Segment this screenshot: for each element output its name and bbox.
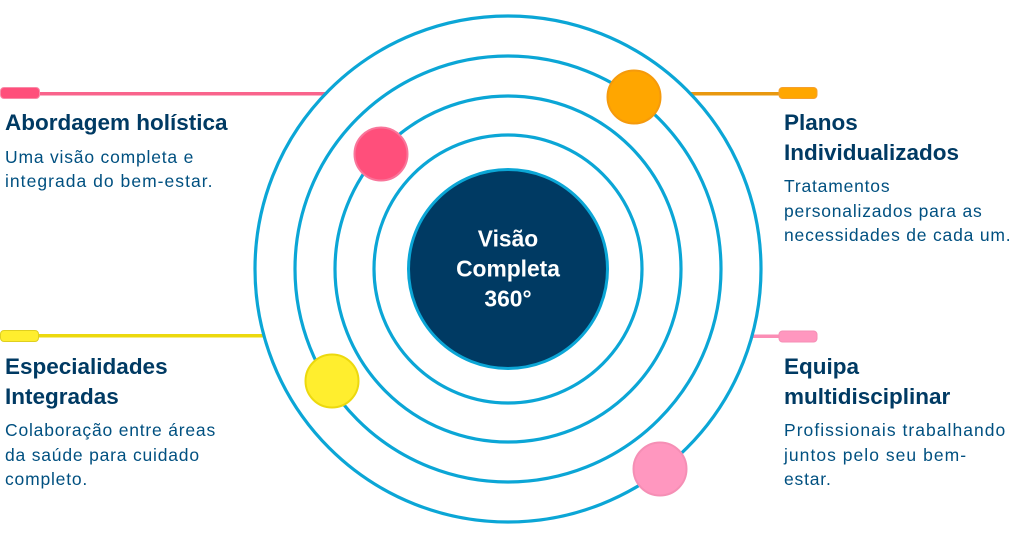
text block: Abordagem holística: Abordagem holística <box>5 110 228 135</box>
text block: Equipa multidisciplinar: Equipa <box>784 354 859 379</box>
center label: Visão <box>478 226 538 252</box>
text block: Equipa multidisciplinar: Profissionais trabalhando <box>784 420 1006 440</box>
text block: Abordagem holística <box>5 110 228 191</box>
text block: Planos Individualizados <box>784 110 1011 245</box>
text block: Especialidades Integradas: Colaboração entre áreas <box>5 420 216 440</box>
text block: Especialidades Integradas: completo. <box>5 469 88 489</box>
text block: Equipa multidisciplinar: juntos pelo seu bem- <box>784 444 967 464</box>
text block: Especialidades Integradas <box>5 354 216 489</box>
text block: Especialidades Integradas: da saúde para cuidado <box>5 444 200 464</box>
rings <box>255 16 761 522</box>
text block: Planos Individualizados: personalizados para as <box>784 200 983 220</box>
text block: Especialidades Integradas: Especialidades <box>5 354 168 379</box>
text block: Equipa multidisciplinar: multidisciplinar <box>784 384 950 408</box>
text block: Planos Individualizados: Planos <box>784 110 858 135</box>
text block: Abordagem holística: integrada do bem-estar. <box>5 171 214 191</box>
node: orange <box>608 70 660 124</box>
connector: yellow line <box>0 330 264 342</box>
connector: pink line <box>0 88 326 98</box>
text block: Equipa multidisciplinar <box>784 354 1006 489</box>
node: yellow <box>306 354 358 408</box>
center label: 360° <box>484 286 532 312</box>
text block: Equipa multidisciplinar: estar. <box>784 469 832 489</box>
text block: Planos Individualizados: Tratamentos <box>784 176 890 196</box>
center circle <box>408 170 608 368</box>
text block: Abordagem holística: Uma visão completa e <box>5 146 194 166</box>
center label: Completa <box>456 256 560 282</box>
node: pink <box>354 128 408 180</box>
connector: orange line <box>691 88 817 98</box>
text block: Especialidades Integradas: Integradas <box>5 384 119 408</box>
connector: light pink line <box>753 331 817 342</box>
node: light pink <box>634 442 686 496</box>
text block: Planos Individualizados: Individualizados <box>784 140 959 164</box>
text block: Planos Individualizados: necessidades de cada um. <box>784 225 1011 245</box>
